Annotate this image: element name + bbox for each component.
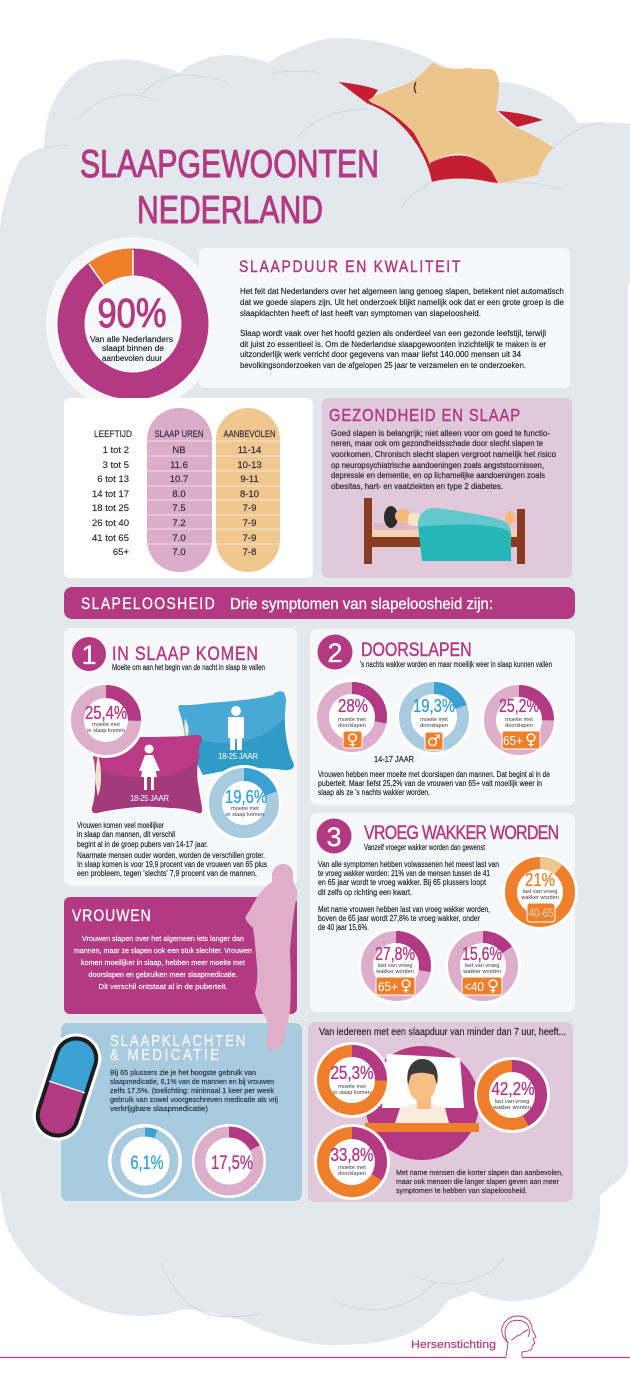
table rows: 7.0 [172, 533, 186, 544]
donut: 19,6 percent: moeite met [231, 806, 259, 812]
donut: 90 percent: 90% [98, 290, 166, 336]
text block: gezondheid: voorkomen. Chronisch slecht slapen vergroot namelijk het risico [331, 450, 557, 459]
subheading: Moeite om aan het begin van de nacht in slaap te vallen [112, 663, 265, 672]
heading: vroeg wakker worden: VROEG WAKKER WORDEN [364, 822, 559, 843]
donut: 15,6 percent: last van vroeg [465, 963, 499, 969]
table rows: 10.7 [170, 474, 188, 485]
text block: vroeg wakker: dit zelfs op richting een kwart. [318, 888, 412, 897]
donut: 42,2 percent: 42,2% [492, 1079, 534, 1099]
table rows: 3 tot 5 [103, 460, 129, 471]
text block: medicatie: zelfs 17,5%. (toelichting: minimaal 1 keer per week [110, 1086, 274, 1095]
donut: 19,6 percent: in slaap komen [226, 812, 264, 818]
text block: vrouwen [74, 934, 252, 991]
text block: in slaap komen: Naarmate mensen ouder worden, worden de verschillen groter. [77, 851, 265, 860]
donut: 25,2 percent: ♀ [525, 730, 537, 749]
table rows [92, 445, 262, 558]
table rows: 8-10 [240, 489, 259, 500]
donut: 25,2 percent [481, 682, 557, 758]
table rows: 8.0 [172, 489, 186, 500]
donut: 19,6 percent: 19,6% [225, 787, 267, 807]
panel: vrouwen [64, 897, 297, 1014]
panel: slaapduur en kwaliteit [199, 248, 570, 388]
icon: pill capsule [26, 1027, 108, 1147]
donut: 6,1 percent: 6,1% [130, 1153, 164, 1174]
panel: 3 vroeg wakker worden [310, 813, 578, 1012]
table rows: 41 tot 65 [92, 533, 129, 544]
donut: 19,6 percent [206, 765, 282, 841]
donut: 28 percent: ♀ [347, 730, 358, 749]
text block: slaapduur intro: dat we goede slapers zijn. Uit het onderzoek blijkt namelijk ook dat er een grote groep is die [240, 298, 565, 307]
icon: head outline [502, 1316, 536, 1357]
illustration: person in bed [364, 498, 525, 564]
donut: 15,6 percent: <40 [464, 979, 484, 994]
donut: 28 percent [314, 679, 390, 755]
silhouette: woman [245, 864, 297, 1050]
title [80, 143, 379, 232]
heading: doorslapen: DOORSLAPEN [361, 639, 472, 660]
illustration: sleeping man [365, 1046, 479, 1160]
text block: langer en korter slapen: maar ook mensen die langer slapen geven aan meer [396, 1177, 559, 1186]
icon: blue pillow with man [178, 691, 294, 775]
label: 14-17 jaar: 14-17 JAAR [374, 755, 414, 764]
donut: 19,3 percent [396, 679, 472, 755]
text block: vrouwen: mannen, maar ze slapen ook een stuk slechter. Vrouwen [74, 946, 252, 955]
illustration: sleeping woman's face [339, 63, 554, 184]
heading: in slaap komen: IN SLAAP KOMEN [112, 643, 258, 664]
donut: 19,3 percent: 19,3% [413, 696, 455, 716]
donut: 27,8 percent: 27,8% [375, 944, 415, 964]
donut: 28 percent: doorslapen [338, 723, 366, 729]
table rows: NB [172, 445, 186, 456]
table rows: 11-14 [238, 445, 261, 456]
table rows: 7.5 [172, 503, 186, 514]
donut: 90 percent: Van alle Nederlanders [90, 335, 173, 344]
donut: 90 percent: aanbevolen duur [102, 354, 162, 363]
table rows: 7-8 [243, 547, 256, 558]
heading: gezondheid: GEZONDHEID EN SLAAP [329, 406, 520, 425]
text block: gezondheid: obesitas, hart- en vaatziekten en type 2 diabetes. [331, 482, 503, 491]
table rows: 14 tot 17 [92, 489, 129, 500]
badge: number 1: 1 [81, 640, 97, 670]
donut: 28 percent: moeite met [338, 717, 366, 723]
badge: number 1 [72, 637, 106, 671]
donut: 15,6 percent: ♀ [487, 976, 499, 995]
title: NEDERLAND [137, 189, 323, 232]
donut: 25,2 percent: 25,2% [499, 696, 539, 716]
donut: 19,3 percent: doorslapen [420, 723, 448, 729]
table headings: LEEFTIJD [94, 429, 132, 440]
donut: 19,3 percent: ♂ [427, 731, 441, 750]
badge: number 3 [316, 818, 352, 854]
text block: in slaap komen: In slaap komen is voor 19,9 procent van de vrouwen van 65 plus [77, 860, 267, 869]
heading: vrouwen: VROUWEN [72, 907, 151, 925]
donut: 15,6 percent: 15,6% [462, 944, 502, 964]
text block: vrouwen: Dit verschil ontstaat al in de puberteit. [98, 982, 228, 991]
text block: in slaap komen: in slaap dan mannen, dit verschil [77, 830, 175, 839]
text block: slaapduur intro: slaapklachten heeft of last heeft van symptomen van slapeloosheid. [240, 309, 481, 318]
text block: slaapduur intro [240, 287, 565, 370]
table rows: 1 tot 2 [103, 445, 129, 456]
badge: number 3: 3 [326, 822, 342, 852]
text block: vrouwen: Vrouwen slapen over het algemeen iets langer dan [82, 934, 244, 943]
text block: doorslapen: Vrouwen hebben meer moeite met doorslapen dan mannen. Dat begint al in de [318, 770, 550, 779]
donut: 19,3 percent: moeite met [420, 717, 448, 723]
baseline rule [0, 1356, 630, 1358]
panel: slaapklachten en medicatie [61, 1023, 302, 1201]
badge: number 2: 2 [327, 638, 343, 668]
banner: slapeloosheid: SLAPELOOSHEID [81, 595, 215, 613]
icon: blue pillow with man: 18-25 JAAR [218, 752, 258, 761]
table rows: 65+ [113, 547, 129, 558]
text block: slaapduur intro: uitzonderlijk werk verricht door gegevens van maar liefst 140.000 mensen uit 34 [240, 350, 522, 359]
donut: 25,4 percent: in slaap komen [87, 728, 125, 734]
icon: purple pillow with woman [92, 735, 202, 813]
text block: vrouwen: doorslapen en gebruiken meer slaapmedicatie. [88, 970, 238, 979]
panel: 2 doorslapen [310, 629, 575, 805]
text block: vroeg wakker: boven de 65 jaar wordt 27,8% te vroeg wakker, onder [318, 914, 480, 923]
donut: 27,8 percent [358, 928, 434, 1004]
donut: 21 percent [502, 854, 578, 930]
donut: 42,2 percent: wakker worden [492, 1105, 531, 1111]
donut: 21 percent: 40-65 [528, 906, 554, 920]
table rows: 7.0 [172, 547, 186, 558]
text block: medicatie: gebruik van zowel voorgeschreven medicatie als vrij [110, 1095, 278, 1104]
table rows: 7.2 [172, 518, 186, 529]
banner: slapeloosheid [64, 587, 575, 619]
logo: hersenstichting [411, 1316, 536, 1357]
text block: in slaap komen: Vrouwen komen veel moeilijker [77, 821, 164, 830]
heading: iedereen korter dan 7 uur: Van iedereen met een slaapduur van minder dan 7 uur, heeft... [319, 1027, 566, 1038]
title: SLAAPGEWOONTEN [80, 143, 379, 186]
foreground cloud lobes [290, 104, 630, 240]
text block: gezondheid: depressie en dementie, en op lichamelijke aandoeningen zoals [331, 471, 545, 480]
heading: slaapklachten [110, 1033, 245, 1064]
donut: 25,4 percent: 25,4% [85, 703, 127, 723]
text block: doorslapen: puberteit. Maar liefst 25,2% van de vrouwen van 65+ valt moeilijk weer in [318, 779, 542, 788]
donut: 33,8 percent: moeite met [338, 1165, 366, 1171]
donut: 25,4 percent: moeite met [92, 722, 120, 728]
text block: in slaap komen [77, 821, 267, 878]
donut: 33,8 percent [314, 1124, 390, 1200]
donut: 21 percent: wakker worden [520, 895, 559, 901]
donut: 17,5 percent: 17,5% [211, 1153, 253, 1174]
heading: slaapduur: SLAAPDUUR EN KWALITEIT [239, 258, 461, 276]
icon: purple pillow with woman: 18-25 JAAR [130, 794, 169, 803]
banner: slapeloosheid: Drie symptomen van slapeloosheid zijn: [230, 596, 493, 613]
panel: gezondheid en slaap [322, 398, 572, 578]
table rows: 26 tot 40 [92, 518, 129, 529]
donut: 25,2 percent: doorslapen [505, 723, 533, 729]
text block: slaapduur intro: dit juist zo essentieel is. Om de Nederlandse slaapgewoonten inzichtelijk te maken is er [240, 340, 546, 349]
text block: slaapduur intro: Het feit dat Nederlanders over het algemeen lang genoeg slapen, betekent niet automatisch [240, 287, 564, 296]
donut: 25,2 percent: 65+ [503, 733, 523, 748]
table rows: 6 tot 13 [97, 474, 129, 485]
table headings [94, 429, 276, 440]
text block: gezondheid: neren, maar ook om gezondheidsschade door slecht slapen te [331, 439, 544, 448]
table rows: 7-9 [243, 518, 256, 529]
donut: 25,4 percent [68, 682, 144, 758]
table rows: 11.6 [170, 460, 188, 471]
column: aanbevolen [216, 408, 280, 572]
donut: 6,1 percent [108, 1124, 182, 1198]
table rows: 9-11 [240, 474, 259, 485]
donut: 90 percent [46, 237, 220, 411]
text block: gezondheid [331, 429, 557, 491]
text block: gezondheid: Goed slapen is belangrijk; niet alleen voor om goed te functio- [331, 429, 550, 438]
donut: 42,2 percent [474, 1057, 550, 1133]
text block: vroeg wakker: Met name vrouwen hebben last van vroeg wakker worden, [318, 905, 490, 914]
subheading: 's nachts wakker worden en maar moeilijk weer in slaap kunnen vallen [360, 660, 552, 669]
text block: vroeg wakker: de 40 jaar 15,6%. [318, 923, 369, 932]
donut: 27,8 percent: last van vroeg [378, 963, 412, 969]
text block: langer en korter slapen: symptomen te hebben van slapeloosheid. [396, 1186, 527, 1195]
text block: slaapduur intro: Slaap wordt vaak over het hoofd gezien als onderdeel van een gezonde leefstijl, terwijl [240, 329, 546, 338]
text block: in slaap komen: begint al in de groep pubers van 14-17 jaar. [77, 840, 208, 849]
donut: 15,6 percent [445, 928, 521, 1004]
donut: 25,3 percent: in slaap komen [333, 1090, 371, 1096]
heading: slaapklachten: & MEDICATIE [110, 1047, 219, 1064]
text block: gezondheid: op neuropsychiatrische aandoeningen zoals angststoornissen, [331, 461, 544, 470]
text block: in slaap komen: een probleem, tegen 'slechts' 7,9 procent van de mannen. [77, 869, 257, 878]
text block: medicatie [110, 1068, 278, 1113]
panel: 1 in slaap komen [64, 628, 297, 886]
table headings: AANBEVOLEN [224, 429, 276, 440]
text block: langer en korter slapen: Met name mensen die korter slapen dan aanbevolen, [396, 1168, 563, 1177]
logo: hersenstichting: Hersenstichting [411, 1339, 496, 1351]
text block: medicatie: verkrijgbare slaapmedicatie) [110, 1104, 209, 1113]
donut: 25,3 percent [314, 1042, 390, 1118]
donut: 17,5 percent [192, 1124, 266, 1198]
text block: medicatie: Bij 65 plussers zie je het hoogste gebruik van [110, 1068, 256, 1077]
donut: 21 percent: last van vroeg [523, 889, 557, 895]
text block: vroeg wakker: en 65 jaar wordt te vroeg wakker. Bij 65 plussers loopt [318, 878, 487, 887]
text block: vrouwen: komen moeilijker in slaap, hebben meer moeite met [81, 958, 246, 967]
donut: 25,3 percent: moeite met [338, 1084, 366, 1090]
text block: medicatie: slaapmedicatie, 6,1% van de mannen en bij vrouwen [110, 1077, 274, 1086]
text block: langer en korter slapen [396, 1168, 563, 1195]
table rows: 18 tot 25 [92, 503, 129, 514]
text block: vroeg wakker: te vroeg wakker worden: 21% van de mensen tussen de 41 [318, 869, 490, 878]
text block: vroeg wakker: Van alle symptomen hebben volwassenen het meest last van [318, 860, 499, 869]
donut: 27,8 percent: wakker worden [375, 969, 414, 975]
text block: slaapduur intro: bevolkingsonderzoeken van de afgelopen 25 jaar te verzamelen en te onderzoeken. [240, 361, 526, 370]
donut: 28 percent: 28% [338, 696, 368, 716]
table rows: 7-9 [243, 503, 256, 514]
donut: 25,2 percent: moeite met [505, 717, 533, 723]
donut: 21 percent: 21% [525, 870, 555, 890]
donut: 42,2 percent: last van vroeg [495, 1099, 529, 1105]
badge: number 2 [318, 634, 352, 670]
column: slaap uren [147, 408, 212, 572]
subheading: Vanzelf vroeger wakker worden dan gewenst [364, 843, 486, 852]
heading: slaapklachten: SLAAPKLACHTEN [110, 1033, 245, 1050]
donut: 27,8 percent: 65+ [378, 979, 398, 994]
table rows: 7-9 [243, 533, 256, 544]
panel: sleep table [64, 398, 313, 578]
donut: 25,3 percent: 25,3% [330, 1063, 374, 1083]
donut: 27,8 percent: ♀ [400, 976, 412, 995]
text block: doorslapen: slaap als ze 's nachts wakker worden. [318, 788, 430, 797]
table rows: 10-13 [237, 460, 262, 471]
text block: vroeg wakker [318, 860, 499, 932]
donut: 33,8 percent: 33,8% [330, 1145, 374, 1165]
text block: doorslapen [318, 770, 550, 797]
table headings: SLAAP UREN [154, 429, 204, 440]
donut: 33,8 percent: doorslapen [338, 1171, 366, 1177]
panel: korte slaapduur [308, 1022, 573, 1202]
donut: 15,6 percent: wakker worden [462, 969, 501, 975]
donut: 90 percent: slaapt binnen de [102, 344, 165, 353]
